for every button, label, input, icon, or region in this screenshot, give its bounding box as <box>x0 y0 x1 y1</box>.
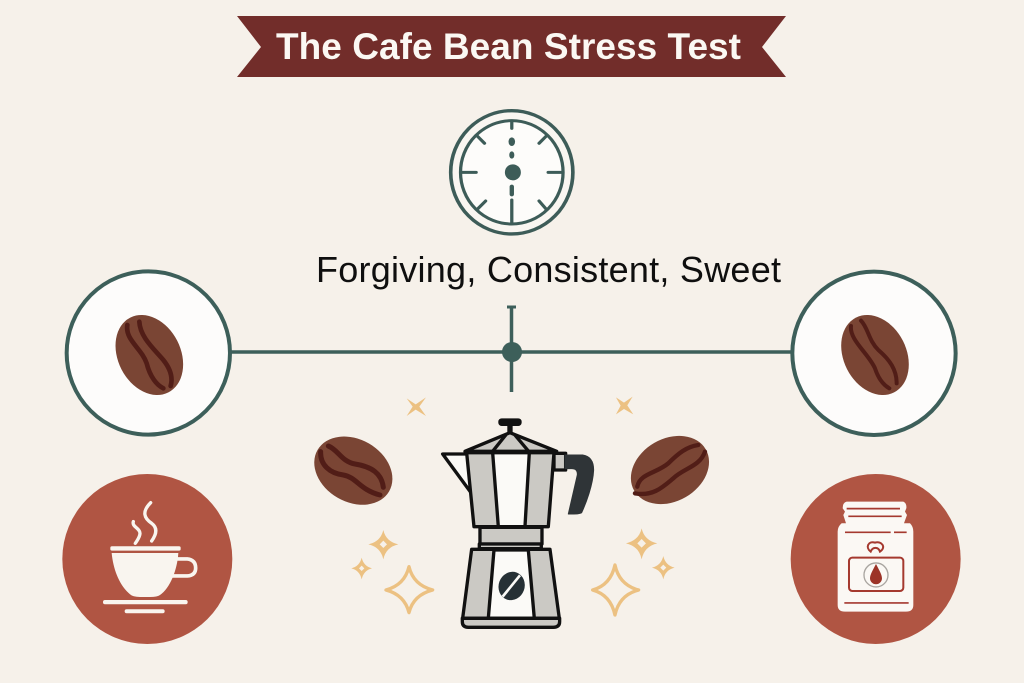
icon: clock <box>451 111 573 234</box>
coffee bean left of moka pot <box>302 423 405 518</box>
connector line <box>228 307 796 392</box>
title banner: The Cafe Bean Stress Test <box>276 26 741 67</box>
title banner <box>237 16 786 77</box>
right bean circle <box>792 272 956 435</box>
sparkles <box>351 397 675 615</box>
icon: coffee cup circle <box>62 474 232 644</box>
subtitle: Forgiving, Consistent, Sweet <box>316 249 781 290</box>
icon: moka pot <box>443 418 594 627</box>
icon: jar circle <box>791 474 961 644</box>
coffee bean right of moka pot <box>619 422 721 518</box>
left bean circle <box>67 271 230 435</box>
